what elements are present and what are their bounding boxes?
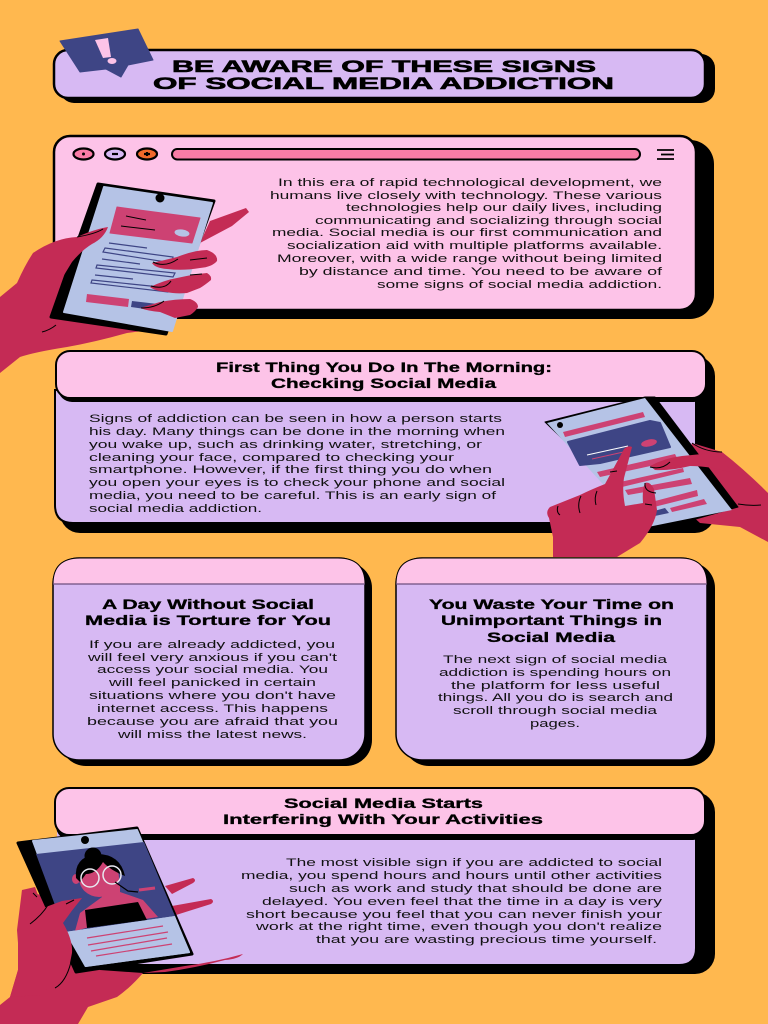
body text: The next sign of social media <box>443 654 668 666</box>
introduction text: socialization aid with multiple platforms available. <box>287 240 662 252</box>
body text: Signs of addiction can be seen in how a person starts <box>89 413 503 425</box>
body text: you wake up, such as drinking water, stretching, or <box>89 439 483 451</box>
panel: first thing in the morning <box>55 351 715 533</box>
body text: his day. Many things can be done in the morning when <box>89 426 505 438</box>
introduction text: some signs of social media addiction. <box>377 279 662 291</box>
introduction text: In this era of rapid technological development, we <box>278 177 662 189</box>
body text: media, you need to be careful. This is an early sign of <box>89 490 497 502</box>
panel: introduction browser window <box>54 136 714 319</box>
introduction text: media. Social media is our first communication and <box>272 227 662 239</box>
body text: delayed. You even feel that the time in a day is very <box>262 896 663 908</box>
right hand finger <box>650 452 730 472</box>
panel: you waste your time <box>396 558 715 766</box>
body text: situations where you don't have <box>89 690 336 702</box>
phone <box>51 184 214 334</box>
body text: short because you feel that you can never finish your <box>246 909 663 921</box>
body text: scroll through social media <box>453 705 658 717</box>
thumb <box>33 227 108 290</box>
body text: will feel panicked in certain <box>107 677 316 689</box>
heading: First Thing You Do In The Morning: <box>216 359 552 375</box>
fingertips behind phone <box>165 878 213 915</box>
body text: because you are afraid that you <box>87 716 338 728</box>
heading <box>216 359 552 391</box>
thumb and palm over phone <box>10 887 82 997</box>
body text: If you are already addicted, you <box>89 639 335 651</box>
illustration: hand holding phone with video call <box>0 828 243 1024</box>
body text: such as work and study that should be done are <box>289 883 662 895</box>
body text: internet access. This happens <box>97 703 329 715</box>
illustration: hand holding phone <box>0 184 249 373</box>
video call person <box>72 848 158 931</box>
title: OF SOCIAL MEDIA ADDICTION <box>153 74 614 93</box>
body text: things. All you do is search and <box>438 692 673 704</box>
icon: menu <box>657 150 674 159</box>
body text: you open your eyes is to check your phone and social <box>89 477 505 489</box>
heading: You Waste Your Time on <box>429 596 674 612</box>
title: BE AWARE OF THESE SIGNS <box>172 57 596 76</box>
body text: The most visible sign if you are addicted to social <box>286 857 662 869</box>
body text <box>86 639 338 741</box>
introduction text: Moreover, with a wide range without being limited <box>277 253 662 265</box>
introduction text: by distance and time. You need to be aware of <box>299 266 664 278</box>
hand behind phone <box>0 890 243 1024</box>
introduction text <box>270 177 664 291</box>
introduction text: technologies help our daily lives, including <box>346 202 662 214</box>
body text: social media addiction. <box>89 503 262 515</box>
fingertip behind phone <box>200 208 249 243</box>
heading: Interfering With Your Activities <box>223 811 543 827</box>
body text <box>438 654 673 730</box>
heading: A Day Without Social <box>102 596 314 612</box>
heading: Checking Social Media <box>271 375 496 391</box>
heading <box>429 596 674 645</box>
body text: that you are wasting precious time yourself. <box>316 934 657 946</box>
address bar <box>172 149 640 160</box>
heading <box>85 596 331 628</box>
heading: Social Media <box>487 629 615 645</box>
body text: the platform for less useful <box>451 680 660 692</box>
heading: Social Media Starts <box>284 795 483 811</box>
illustration: hands tapping tablet <box>545 397 768 557</box>
fingers <box>140 250 217 318</box>
panel: a day without social media <box>53 558 372 766</box>
icon: alert speech bubble <box>60 29 153 77</box>
body text: smartphone. However, if the first thing you do when <box>89 464 492 476</box>
body text: will miss the latest news. <box>116 729 307 741</box>
panel: title banner <box>54 50 715 103</box>
body text <box>241 857 663 946</box>
body text: work at the right time, even though you don't realize <box>254 921 662 933</box>
body text <box>89 413 505 515</box>
right hand behind tablet <box>680 443 768 542</box>
introduction text: communicating and socializing through social <box>315 215 662 227</box>
heading: Unimportant Things in <box>441 612 662 628</box>
body text: pages. <box>530 718 580 730</box>
panel: interfering with your activities <box>55 788 715 974</box>
window control buttons <box>74 148 157 160</box>
body text: cleaning your face, compared to checking your <box>89 452 455 464</box>
tablet <box>545 397 738 530</box>
heading: Media is Torture for You <box>85 612 331 628</box>
body text: addiction is spending hours on <box>439 667 671 679</box>
pointing hand <box>547 446 657 557</box>
hand behind phone <box>0 237 150 373</box>
body text: media, you spend hours and hours until other activities <box>241 870 663 882</box>
heading <box>223 795 543 827</box>
title <box>153 57 614 93</box>
introduction text: humans live closely with technology. These various <box>270 190 663 202</box>
body text: access your social media. You <box>97 664 328 676</box>
phone <box>18 828 192 972</box>
body text: will feel very anxious if you can't <box>86 652 337 664</box>
